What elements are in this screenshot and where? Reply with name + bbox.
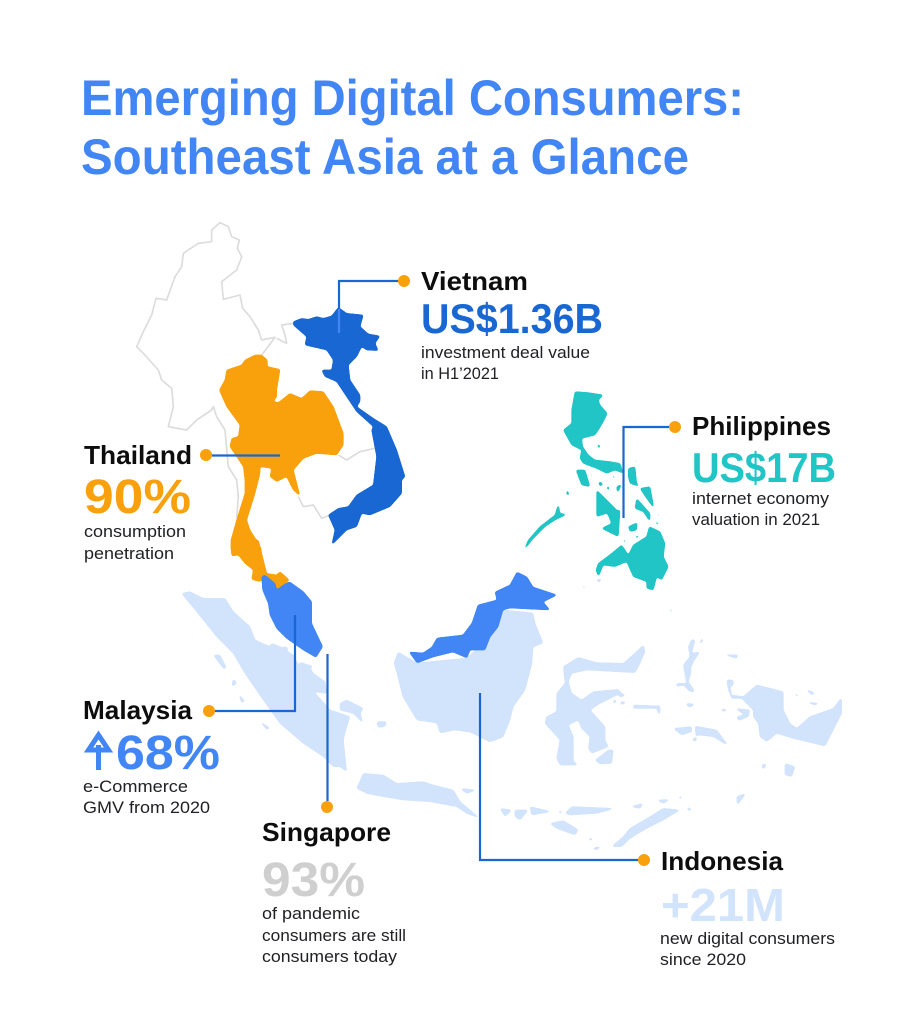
text block: Malaysia: GMV from 2020: [83, 798, 210, 817]
text block: Indonesia: Indonesia: [661, 846, 784, 876]
text block: Thailand: 90%: [84, 471, 191, 524]
map: Indonesia, eastern islands: [500, 638, 842, 850]
text block: Singapore: 93%: [262, 854, 365, 907]
map: Philippines: [523, 392, 673, 628]
text block: Singapore: Singapore: [262, 817, 391, 847]
marker: Indonesia: [638, 854, 650, 866]
marker: Philippines: [669, 421, 681, 433]
text block: Indonesia: since 2020: [660, 950, 746, 969]
text block: Indonesia: new digital consumers: [660, 929, 835, 948]
text block: Malaysia: 68%: [116, 727, 220, 780]
text block: Malaysia: Malaysia: [83, 695, 193, 725]
text block: Thailand: Thailand: [84, 440, 192, 470]
title: [81, 70, 744, 185]
map: Indonesia, Sumatra and Java: [182, 592, 480, 818]
text block: Philippines: [692, 411, 836, 529]
map: Indonesia, Kalimantan: [394, 610, 543, 742]
text block: Philippines: internet economy: [692, 489, 830, 508]
text block: Vietnam: in H1’2021: [421, 364, 499, 383]
text block: Vietnam: US$1.36B: [421, 295, 603, 342]
text block: Indonesia: +21M: [661, 879, 785, 931]
text block: Philippines: US$17B: [692, 444, 836, 491]
title: Emerging Digital Consumers:: [81, 70, 744, 126]
text block: Thailand: penetration: [84, 544, 174, 563]
marker: Vietnam: [398, 275, 410, 287]
callout line: Philippines: [624, 427, 669, 518]
text block: Singapore: consumers today: [262, 947, 398, 966]
text block: Indonesia: [660, 846, 835, 969]
text block: Malaysia: [83, 695, 220, 817]
callout line: Malaysia: [215, 615, 295, 711]
marker: Malaysia: [203, 705, 215, 717]
callout line: Singapore: [326, 654, 329, 801]
callout line: Indonesia: [480, 693, 638, 860]
text block: Philippines: Philippines: [692, 411, 831, 441]
text block: Vietnam: Vietnam: [421, 266, 528, 296]
map of Southeast Asia: [137, 223, 842, 850]
text block: Thailand: [84, 440, 192, 563]
map: Vietnam: [293, 307, 405, 545]
icon: up arrow: [88, 735, 108, 770]
text block: Singapore: consumers are still: [262, 926, 406, 945]
text block: Singapore: [262, 817, 406, 966]
map: Thailand: [219, 355, 343, 590]
marker: Thailand: [200, 449, 212, 461]
map: neighbouring country outlines: [137, 223, 375, 518]
text block: Vietnam: investment deal value: [421, 343, 590, 362]
text block: Philippines: valuation in 2021: [692, 510, 820, 529]
text block: Malaysia: e-Commerce: [83, 777, 188, 796]
text block: Singapore: of pandemic: [262, 904, 361, 923]
marker: Singapore: [321, 801, 333, 813]
text block: Thailand: consumption: [84, 522, 186, 541]
callout line: Thailand: [212, 454, 280, 457]
callout line: Vietnam: [339, 281, 399, 333]
title: Southeast Asia at a Glance: [81, 129, 689, 185]
map: Malaysia: [262, 572, 557, 663]
text block: Vietnam: [421, 266, 603, 383]
